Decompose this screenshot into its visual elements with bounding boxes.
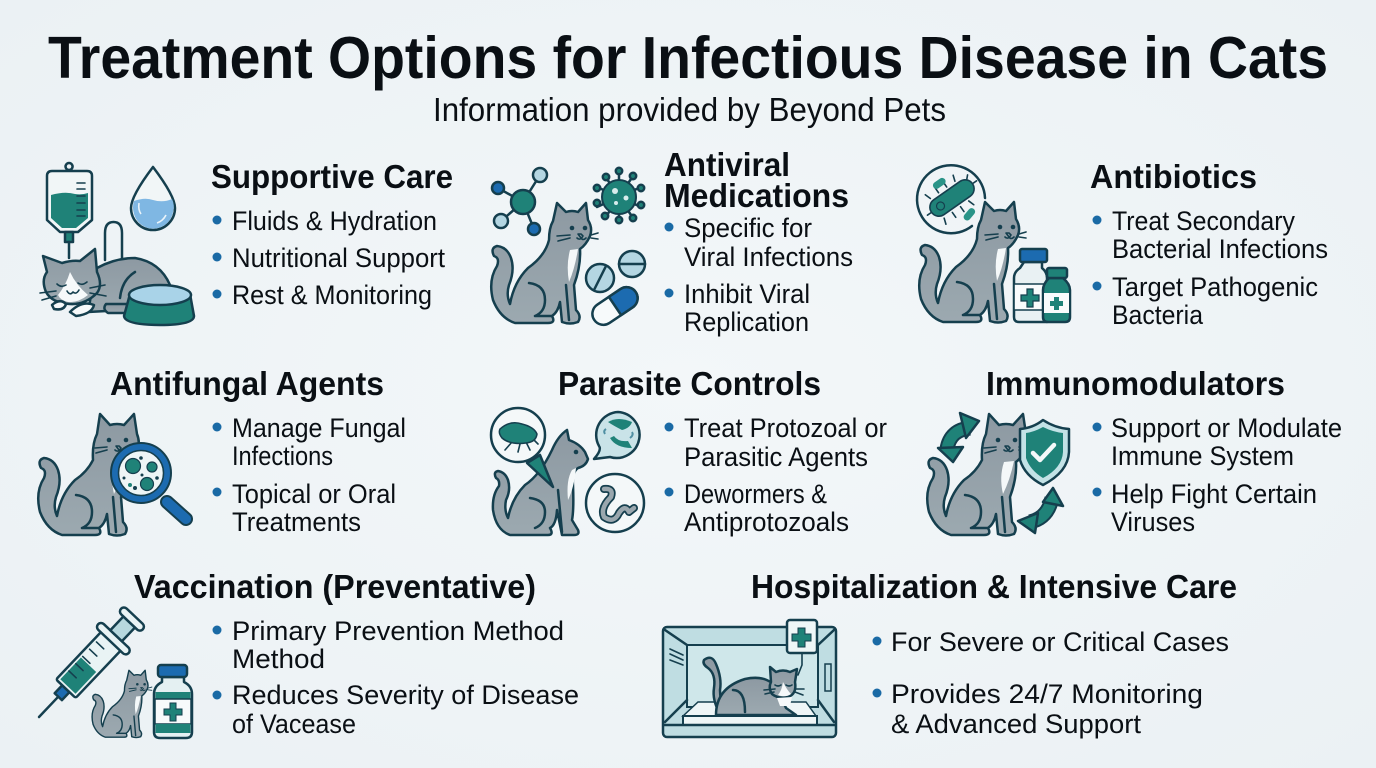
heading: immunomodulators: Immunomodulators [986, 365, 1285, 402]
bullet list: Treat Secondary [1112, 206, 1295, 236]
bullet list: Viral Infections [684, 242, 853, 272]
bullet list: Inhibit Viral [684, 279, 810, 309]
bullet list [872, 627, 1229, 739]
icon: flea in circle [491, 408, 553, 487]
icon: resting cat [704, 658, 804, 715]
heading: antiviral medications: Medications [664, 177, 849, 214]
heading: antiviral medications [664, 146, 849, 214]
icon: cat [491, 203, 598, 324]
bullet list [1092, 413, 1342, 537]
bullet list: For Severe or Critical Cases [891, 627, 1229, 657]
bullet list: Treat Protozoal or [684, 413, 887, 443]
bullet list: Support or Modulate [1111, 413, 1342, 443]
title: Treatment Options for Infectious Disease in Cats [48, 25, 1328, 91]
bullet list: Help Fight Certain [1111, 479, 1317, 509]
panel: immunomodulators [927, 365, 1342, 537]
icon: small cat [92, 670, 152, 738]
icon: virus [594, 168, 644, 223]
bullet list [212, 616, 579, 739]
panel: supportive care [40, 158, 453, 325]
bullet list [664, 413, 887, 537]
bullet list: Nutritional Support [232, 243, 445, 273]
panel: antifungal agents [38, 365, 406, 537]
bullet list: Parasitic Agents [684, 442, 868, 472]
bullet list: Manage Fungal [232, 413, 406, 443]
bullet list: Immune System [1111, 441, 1294, 471]
bullet list [212, 206, 445, 310]
heading: supportive care: Supportive Care [211, 158, 453, 195]
panel: antiviral medications [491, 146, 853, 337]
heading: antifungal agents: Antifungal Agents [110, 365, 384, 402]
bullet list: of Vacease [232, 709, 356, 739]
bullet list: Antiprotozoals [684, 507, 849, 537]
bullet list: Treatments [232, 507, 361, 537]
icon: pills [586, 251, 645, 329]
bullet list: Provides 24/7 Monitoring [891, 679, 1203, 709]
bullet list: Rest & Monitoring [232, 280, 432, 310]
icon: IV box [787, 620, 817, 675]
icon: sleeping cat [40, 249, 194, 325]
icon: magnifying glass [111, 443, 186, 519]
bullet list [664, 213, 853, 337]
icon: cat in profile [493, 430, 588, 535]
bullet list: Method [232, 644, 325, 674]
icon: vaccine vial [154, 665, 192, 738]
bullet list: Topical or Oral [232, 479, 396, 509]
panel: vaccination [24, 568, 579, 739]
subtitle: Information provided by Beyond Pets [433, 91, 946, 128]
icon: shield with check [1020, 420, 1069, 485]
bullet list [1092, 206, 1328, 330]
bullet list: Replication [684, 307, 809, 337]
bullet list: Specific for [684, 213, 812, 243]
icon: syringe [24, 602, 150, 731]
icon: IV bag [47, 163, 122, 260]
icon: cycle arrows [938, 413, 1063, 533]
panel: antibiotics [917, 158, 1328, 330]
icon: water drop [131, 167, 175, 230]
icon: cat [919, 202, 1026, 322]
heading: parasite controls: Parasite Controls [558, 365, 821, 402]
bullet list: & Advanced Support [891, 709, 1141, 739]
bullet list: Primary Prevention Method [232, 616, 564, 646]
icon: medicine bottles [1014, 249, 1070, 322]
bullet list: Bacterial Infections [1112, 234, 1328, 264]
icon: cat [927, 414, 1028, 536]
icon: worm in circle [586, 474, 644, 532]
icon: protozoa speech bubble [594, 412, 640, 459]
icon: molecule [492, 168, 547, 235]
bullet list: Reduces Severity of Disease [232, 680, 579, 710]
bullet list: Bacteria [1112, 300, 1204, 330]
heading: antibiotics: Antibiotics [1090, 158, 1257, 195]
heading: antiviral medications: Antiviral [664, 146, 790, 183]
icon: incubator with cat [663, 620, 836, 737]
panel: parasite controls [491, 365, 887, 537]
bullet list: Dewormers & [684, 479, 827, 509]
panel: hospitalization [663, 568, 1237, 739]
icon: bacteria in circle [917, 165, 987, 233]
bullet list [212, 413, 406, 537]
bullet list: Infections [232, 441, 333, 471]
bullet list: Viruses [1111, 507, 1195, 537]
heading: vaccination: Vaccination (Preventative) [134, 568, 536, 605]
icon: cat [38, 414, 139, 536]
bullet list: Fluids & Hydration [232, 206, 437, 236]
bullet list: Target Pathogenic [1112, 272, 1318, 302]
heading: hospitalization: Hospitalization & Intensive Care [751, 568, 1237, 605]
